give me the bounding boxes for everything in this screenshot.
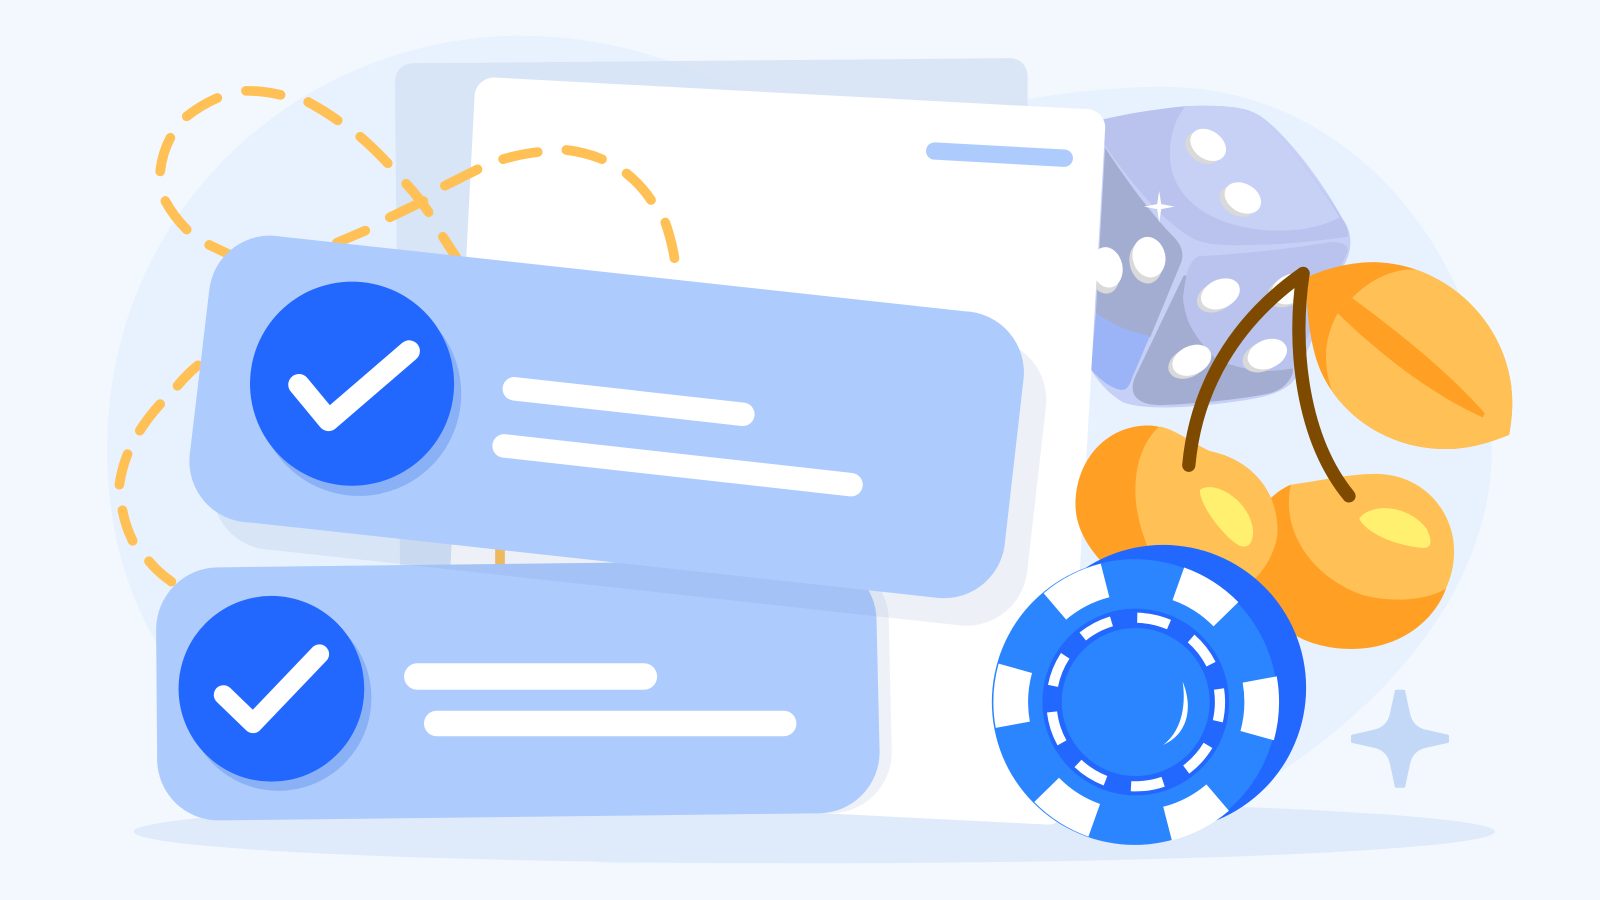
lower card body (156, 560, 880, 820)
document title bar (935, 151, 1064, 158)
chip crescent highlight (1163, 682, 1188, 745)
chip back edge (1020, 545, 1306, 831)
lower card shadow (306, 560, 892, 816)
dice left face reflection (1091, 313, 1150, 390)
white document card (439, 78, 1105, 825)
dice sparkle (1144, 191, 1174, 222)
panel: lower check card (156, 560, 892, 820)
dice left face (1096, 148, 1182, 338)
ground shadow (134, 800, 1495, 863)
panel: upper check card (189, 236, 1046, 626)
cherry stems (1189, 273, 1349, 496)
chip ring dashes (1051, 618, 1220, 786)
chip inner ring (1052, 618, 1219, 786)
dice body (1091, 107, 1350, 408)
icon: lower check badge (179, 596, 371, 791)
dice lower face (1133, 276, 1293, 405)
chip face (992, 559, 1278, 845)
left cherry (1076, 426, 1278, 622)
upper card body (189, 236, 1024, 598)
background blob (107, 36, 1492, 863)
leaf (1306, 262, 1512, 449)
icon: casino chip (992, 545, 1306, 845)
right cherry (1248, 474, 1454, 649)
icon: upper check badge (250, 282, 461, 496)
dice top face (1103, 106, 1348, 245)
dice lower face highlight (1183, 242, 1348, 371)
dashed flight path (119, 91, 674, 582)
dice pips (1085, 122, 1315, 385)
dice top face highlight (1170, 106, 1340, 231)
upper card shadow (212, 263, 1046, 626)
back card (395, 58, 1028, 571)
upper card text bars (504, 389, 851, 485)
lower card text bars (417, 677, 784, 723)
icon: sparkle (1352, 691, 1448, 787)
icon: cherries (1076, 262, 1541, 649)
icon: dice (1085, 106, 1350, 408)
chip outer white blocks (1011, 577, 1262, 828)
